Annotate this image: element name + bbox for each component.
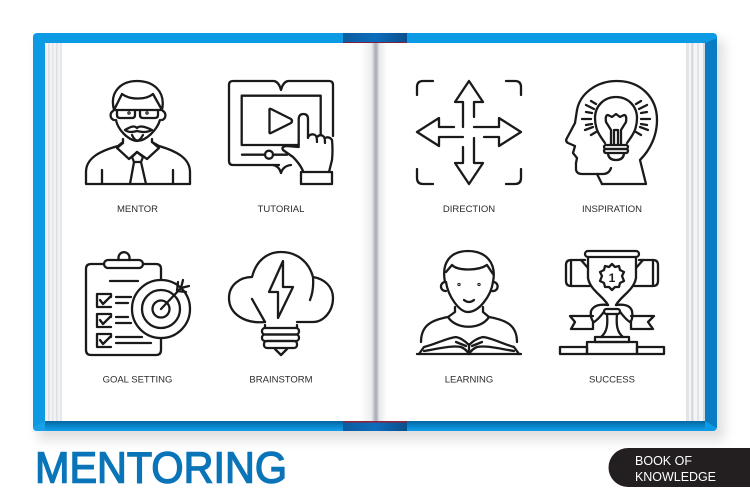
icon: tutorial	[229, 81, 333, 184]
badge: book of knowledge: KNOWLEDGE	[635, 469, 716, 484]
icon: direction	[417, 81, 521, 184]
label: brainstorm: BRAINSTORM	[249, 375, 313, 386]
label: inspiration: INSPIRATION	[582, 204, 642, 215]
card: direction	[417, 81, 521, 215]
card: inspiration	[566, 81, 657, 215]
label: tutorial: TUTORIAL	[258, 204, 304, 215]
icon: success	[560, 251, 664, 354]
badge: book of knowledge: BOOK OF	[635, 453, 692, 468]
label: learning: LEARNING	[445, 375, 493, 386]
book cover	[33, 33, 717, 431]
card: tutorial	[229, 81, 333, 215]
card: goal setting	[86, 252, 190, 386]
title: MENTORING	[35, 444, 287, 493]
icon: mentor	[86, 81, 190, 184]
headband top	[343, 42, 407, 43]
headband bottom	[343, 421, 407, 423]
medal number: 1	[609, 271, 616, 285]
spine top	[343, 33, 407, 43]
label: mentor: MENTOR	[117, 204, 158, 215]
label: success: SUCCESS	[589, 375, 635, 386]
card: success	[560, 251, 664, 386]
spine bottom	[343, 421, 407, 431]
icon: goal setting	[86, 252, 190, 355]
label: direction: DIRECTION	[443, 204, 495, 215]
pages	[45, 43, 705, 421]
label: goal setting: GOAL SETTING	[103, 375, 172, 386]
panel: open book	[33, 33, 724, 440]
icon: brainstorm	[229, 252, 333, 355]
card: mentor	[86, 81, 190, 215]
card: brainstorm	[229, 252, 333, 386]
icon: learning	[417, 251, 521, 354]
book shadow	[38, 40, 724, 440]
icon: inspiration	[566, 81, 657, 184]
card: learning	[417, 251, 521, 386]
badge: book of knowledge	[608, 448, 750, 487]
